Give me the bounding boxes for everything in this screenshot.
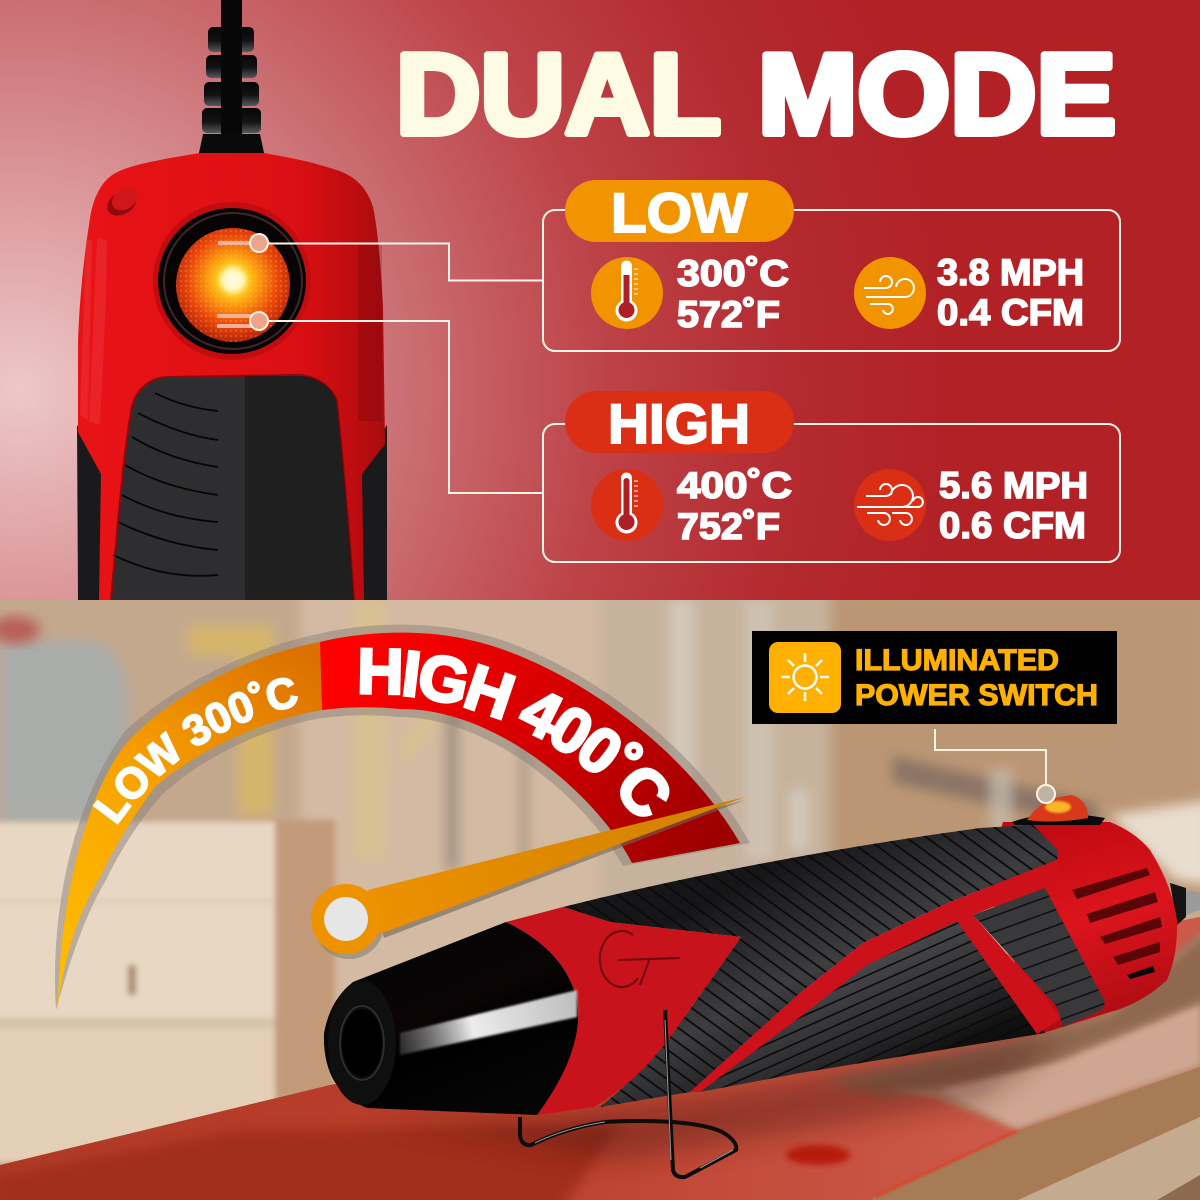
- vents: [1072, 868, 1162, 979]
- callout label: POWER SWITCH: [855, 679, 1098, 712]
- blurred jug: [0, 640, 128, 825]
- callout pointer line: [935, 729, 1055, 803]
- icon: thermometer high: [591, 469, 663, 541]
- red collar: [506, 907, 741, 1115]
- high label: HIGH 400˚C: [360, 648, 670, 817]
- blurred shelves: [0, 820, 335, 1162]
- gauge needle: [311, 797, 745, 959]
- table shadow under tool: [370, 1037, 1060, 1160]
- icon: sun: [769, 642, 841, 713]
- low pill: LOW: [611, 181, 747, 244]
- icon: wind high: [854, 469, 926, 541]
- callout lines from switch: [250, 234, 542, 493]
- panel: low mode: [543, 180, 1120, 351]
- icon: wind low: [854, 257, 926, 329]
- rear grip panel: [973, 888, 1105, 1027]
- high temperature text: 752˚F: [677, 506, 780, 547]
- power plug stub: [1170, 883, 1200, 925]
- high pill: [565, 391, 794, 455]
- icon: thermometer low: [591, 257, 663, 329]
- speed gauge: [55, 624, 750, 1010]
- screw dimple: [107, 188, 138, 216]
- title: [396, 32, 1116, 158]
- high pill: HIGH: [608, 392, 750, 455]
- title: MODE: [758, 32, 1116, 158]
- title: DUAL: [396, 32, 721, 158]
- low arc segment: [58, 642, 322, 1007]
- low airflow text: [937, 252, 1084, 333]
- low airflow text: 0.4 CFM: [937, 292, 1084, 333]
- collar logo mark: [600, 931, 680, 987]
- high temperature text: [677, 465, 792, 547]
- lower black grip panel: [700, 915, 1045, 1092]
- side detail strips: [80, 238, 107, 425]
- rubber grip: [111, 375, 354, 600]
- panel: high mode: [543, 391, 1120, 562]
- workshop background photo: [0, 590, 1200, 1200]
- high arc segment: [320, 633, 740, 863]
- table board: [0, 917, 1200, 1200]
- high temperature text: 400˚C: [677, 465, 792, 506]
- power cord: [199, 0, 264, 153]
- low label: LOW 300˚C: [92, 678, 298, 825]
- high airflow text: 5.6 MPH: [939, 465, 1088, 506]
- red swoosh and strip: [690, 860, 1062, 1092]
- rocker switch housing: [153, 202, 311, 360]
- blurred light patch right: [1110, 800, 1200, 885]
- wire stand: [520, 1010, 736, 1177]
- callout label: [855, 644, 1098, 712]
- low pill: [565, 180, 794, 244]
- low temperature text: 572˚F: [677, 294, 780, 335]
- black side rails: [77, 425, 387, 600]
- rear red housing: [985, 822, 1177, 1034]
- high airflow text: 0.6 CFM: [939, 505, 1086, 546]
- illuminated rocker: [176, 228, 290, 342]
- low airflow text: 3.8 MPH: [937, 252, 1084, 293]
- low temperature text: 300˚C: [677, 253, 789, 294]
- callout label: ILLUMINATED: [855, 644, 1059, 677]
- low temperature text: [677, 253, 789, 335]
- callout: illuminated power switch: [752, 631, 1117, 724]
- gauge shadow halo: [55, 625, 750, 1010]
- top panel background: [0, 0, 1200, 600]
- switch markings: [217, 241, 252, 328]
- black nozzle: [324, 922, 578, 1115]
- product photo: tool rear with rocker switch: [77, 0, 387, 600]
- upper black grip: [563, 825, 1058, 1107]
- high airflow text: [939, 465, 1088, 546]
- red body: [78, 153, 385, 600]
- illuminated switch dome: [1012, 795, 1105, 825]
- product photo: heat tool on stand: [324, 795, 1200, 1177]
